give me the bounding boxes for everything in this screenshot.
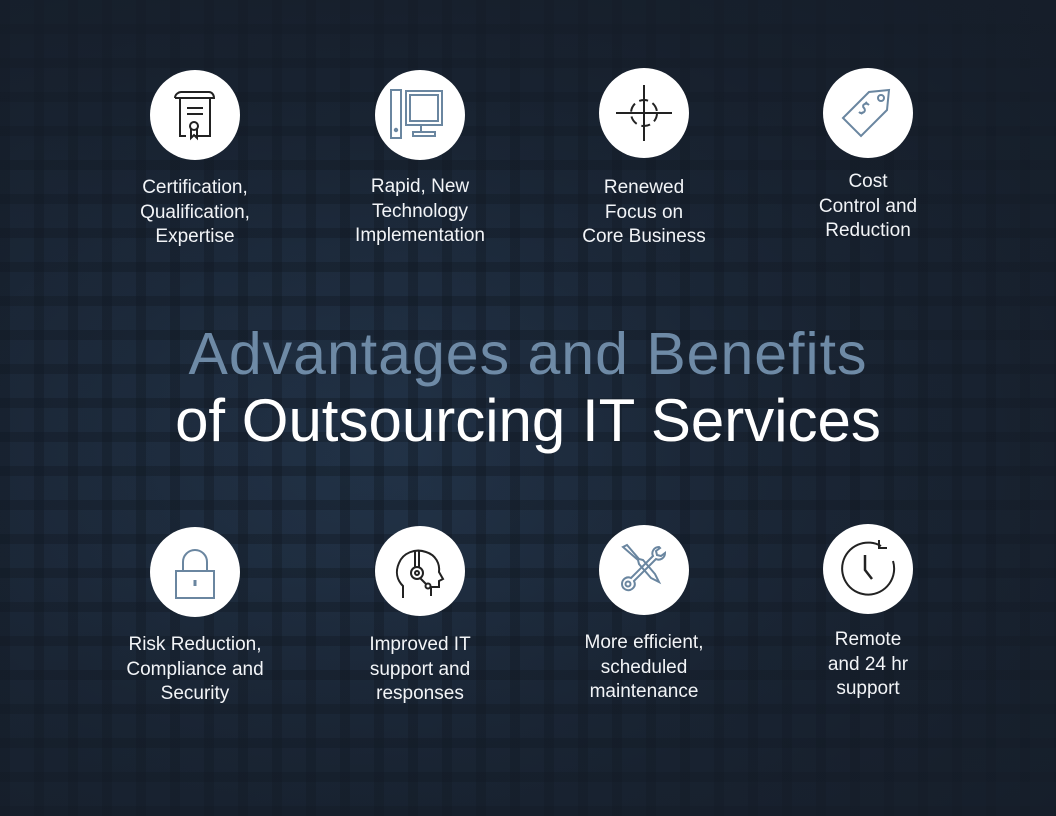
title [175,321,881,454]
label: risk: Risk Reduction, [128,634,262,655]
title line 2: of Outsourcing IT Services [175,387,881,454]
label: remote [828,629,908,699]
label: technology [355,176,485,246]
label: cost: Reduction [825,220,911,241]
label: focus: Focus on [605,202,683,222]
title line 1: Advantages and Benefits [188,321,868,387]
icon: computer [375,70,465,160]
label: remote: and 24 hr [828,654,908,674]
label: certification: Qualification, [140,202,250,222]
label: maintenance [584,632,703,702]
label: focus [582,177,706,247]
label: focus: Renewed [604,177,684,198]
icon: certificate [150,70,240,160]
label: risk: Security [161,683,229,704]
label: technology: Technology [372,200,468,222]
label: support [369,634,471,704]
label: risk: Compliance and [126,658,264,680]
label: maintenance: More efficient, [584,632,703,653]
label: remote: Remote [835,629,901,650]
label: certification: Certification, [142,177,248,198]
label: cost: Cost [848,171,888,192]
label: cost: Control and [819,196,917,216]
label: certification: Expertise [155,226,235,247]
icon: clock [823,524,913,614]
icon: tools [599,525,689,615]
label: technology: Implementation [355,225,485,246]
label: remote: support [836,678,900,699]
icon: crosshair [599,68,689,158]
label: maintenance: maintenance [590,681,698,702]
label: certification [140,177,250,247]
icon: price tag [823,68,913,158]
icon: headset [375,526,465,616]
label: technology: Rapid, New [371,176,469,197]
icon: lock [150,527,240,617]
label: support: Improved IT [369,634,471,655]
label: maintenance: scheduled [601,656,687,678]
label: focus: Core Business [582,226,706,247]
label: cost [819,171,917,241]
label: support: support and [370,658,470,680]
label: support: responses [376,683,464,704]
label: risk [126,634,264,704]
